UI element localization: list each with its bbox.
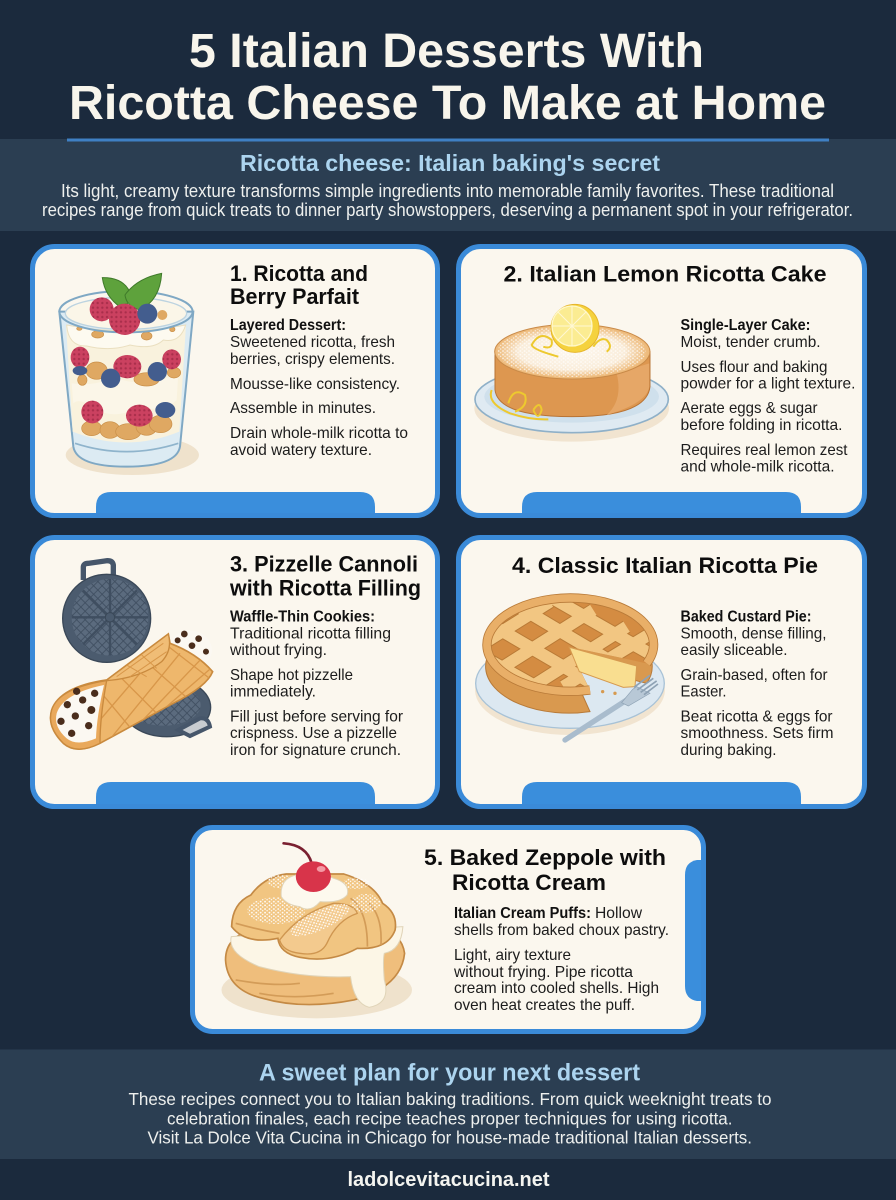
card 3 text: Traditional ricotta filling [230,626,391,642]
card 5 text [453,905,669,1014]
card 2 text: Aerate eggs & sugar [680,400,818,417]
icon: parfait glass [59,273,199,475]
card 3 heading [229,552,421,600]
card 4 text [680,608,834,759]
card 1 heading: Berry Parfait [230,284,360,309]
panel: card 2 italian lemon ricotta cake [458,246,864,516]
card 1 text: Assemble in minutes. [230,400,376,417]
card 5 text: Hollow [595,905,642,922]
card 4 text: Beat ricotta & eggs for [680,708,833,726]
card 3 heading: 3. Pizzelle Cannoli [230,552,418,576]
card 1 text: Mousse-like consistency. [230,376,400,393]
card 2 text: Uses flour and baking [680,359,828,376]
icon: zeppole with cherry [221,843,412,1018]
card 2 heading: 2. Italian Lemon Ricotta Cake [504,262,826,286]
card 2 text: Single-Layer Cake: [680,317,810,334]
card 3 text: Waffle-Thin Cookies: [230,608,375,626]
closing text: Visit La Dolce Vita Cucina in Chicago for house-made traditional Italian desserts. [148,1128,752,1148]
title: Ricotta Cheese To Make at Home [69,77,826,130]
card 5 heading [424,845,666,895]
panel: card 4 classic italian ricotta pie [458,538,864,806]
card 1 text: Layered Dessert: [230,317,346,334]
card 2 text: powder for a light texture. [680,376,856,392]
card 2 text: and whole-milk ricotta. [680,458,834,476]
card 5 text: cream into cooled shells. High [454,980,659,997]
closing text: These recipes connect you to Italian baking traditions. From quick weeknight treats to [128,1089,772,1109]
card 4 text: Smooth, dense filling, [680,626,826,642]
icon: pizzelle iron and cannoli [51,561,217,749]
card 3 text [229,608,404,759]
website footer: ladolcevitacucina.net [348,1169,550,1191]
panel: card 5 baked zeppole [192,828,704,1032]
card 2 text: Moist, tender crumb. [680,334,820,351]
closing text [128,1089,772,1148]
card 1 text: avoid watery texture. [230,442,372,459]
card 1 text [230,317,408,459]
card 5 text: without frying. Pipe ricotta [453,964,633,981]
card 2 text: Requires real lemon zest [680,442,848,459]
intro text: Its light, creamy texture transforms simple ingredients into memorable family favorites. These traditional [61,181,834,201]
card 4 text: easily sliceable. [680,642,788,659]
title: 5 Italian Desserts With [189,25,704,78]
intro heading: Ricotta cheese: Italian baking's secret [240,150,660,176]
panel: card 3 pizzelle cannoli [32,538,438,806]
card 5 heading: 5. Baked Zeppole with [424,845,666,870]
card 4 text: Easter. [680,684,726,700]
card 4 text: smoothness. Sets firm [680,725,834,742]
intro text [42,181,853,220]
card 3 text: Fill just before serving for [230,708,404,726]
panel: card 1 ricotta and berry parfait [32,246,438,516]
icon: lemon ricotta cake [474,304,669,442]
closing heading: A sweet plan for your next dessert [259,1060,640,1086]
card 3 text: immediately. [230,684,316,700]
icon: lattice ricotta pie with fork [475,597,667,740]
card 4 text: Baked Custard Pie: [680,608,812,626]
card 3 text: Shape hot pizzelle [230,667,353,684]
card 2 text: before folding in ricotta. [680,417,842,434]
card 5 heading: Ricotta Cream [452,870,606,895]
closing text: celebration finales, each recipe teaches proper techniques for using ricotta. [167,1108,732,1128]
card 3 text: crispness. Use a pizzelle [230,725,397,742]
card 1 text: Drain whole-milk ricotta to [230,425,408,442]
panel: closing band [0,1050,896,1159]
card 3 text: without frying. [229,642,327,659]
card 5 text: shells from baked choux pastry. [454,922,669,939]
card 5 text: Light, airy texture [454,947,571,964]
card 2 text [680,317,856,476]
card 5 text: Italian Cream Puffs: [454,905,591,922]
card 4 heading: 4. Classic Italian Ricotta Pie [512,553,818,578]
card 1 heading: 1. Ricotta and [230,261,368,286]
card 4 text: Grain-based, often for [680,667,828,684]
card 4 text: during baking. [680,742,776,759]
card 1 text: berries, crispy elements. [230,351,395,368]
card 1 text: Sweetened ricotta, fresh [230,334,395,351]
card 3 heading: with Ricotta Filling [229,576,421,600]
card 1 heading [230,261,368,309]
card 5 text: oven heat creates the puff. [454,997,635,1014]
panel: intro band [0,138,896,231]
card 3 text: iron for signature crunch. [230,742,401,759]
title [69,25,826,130]
intro text: recipes range from quick treats to dinner party showstoppers, deserving a permanent spot in your refrigerator. [42,200,853,220]
